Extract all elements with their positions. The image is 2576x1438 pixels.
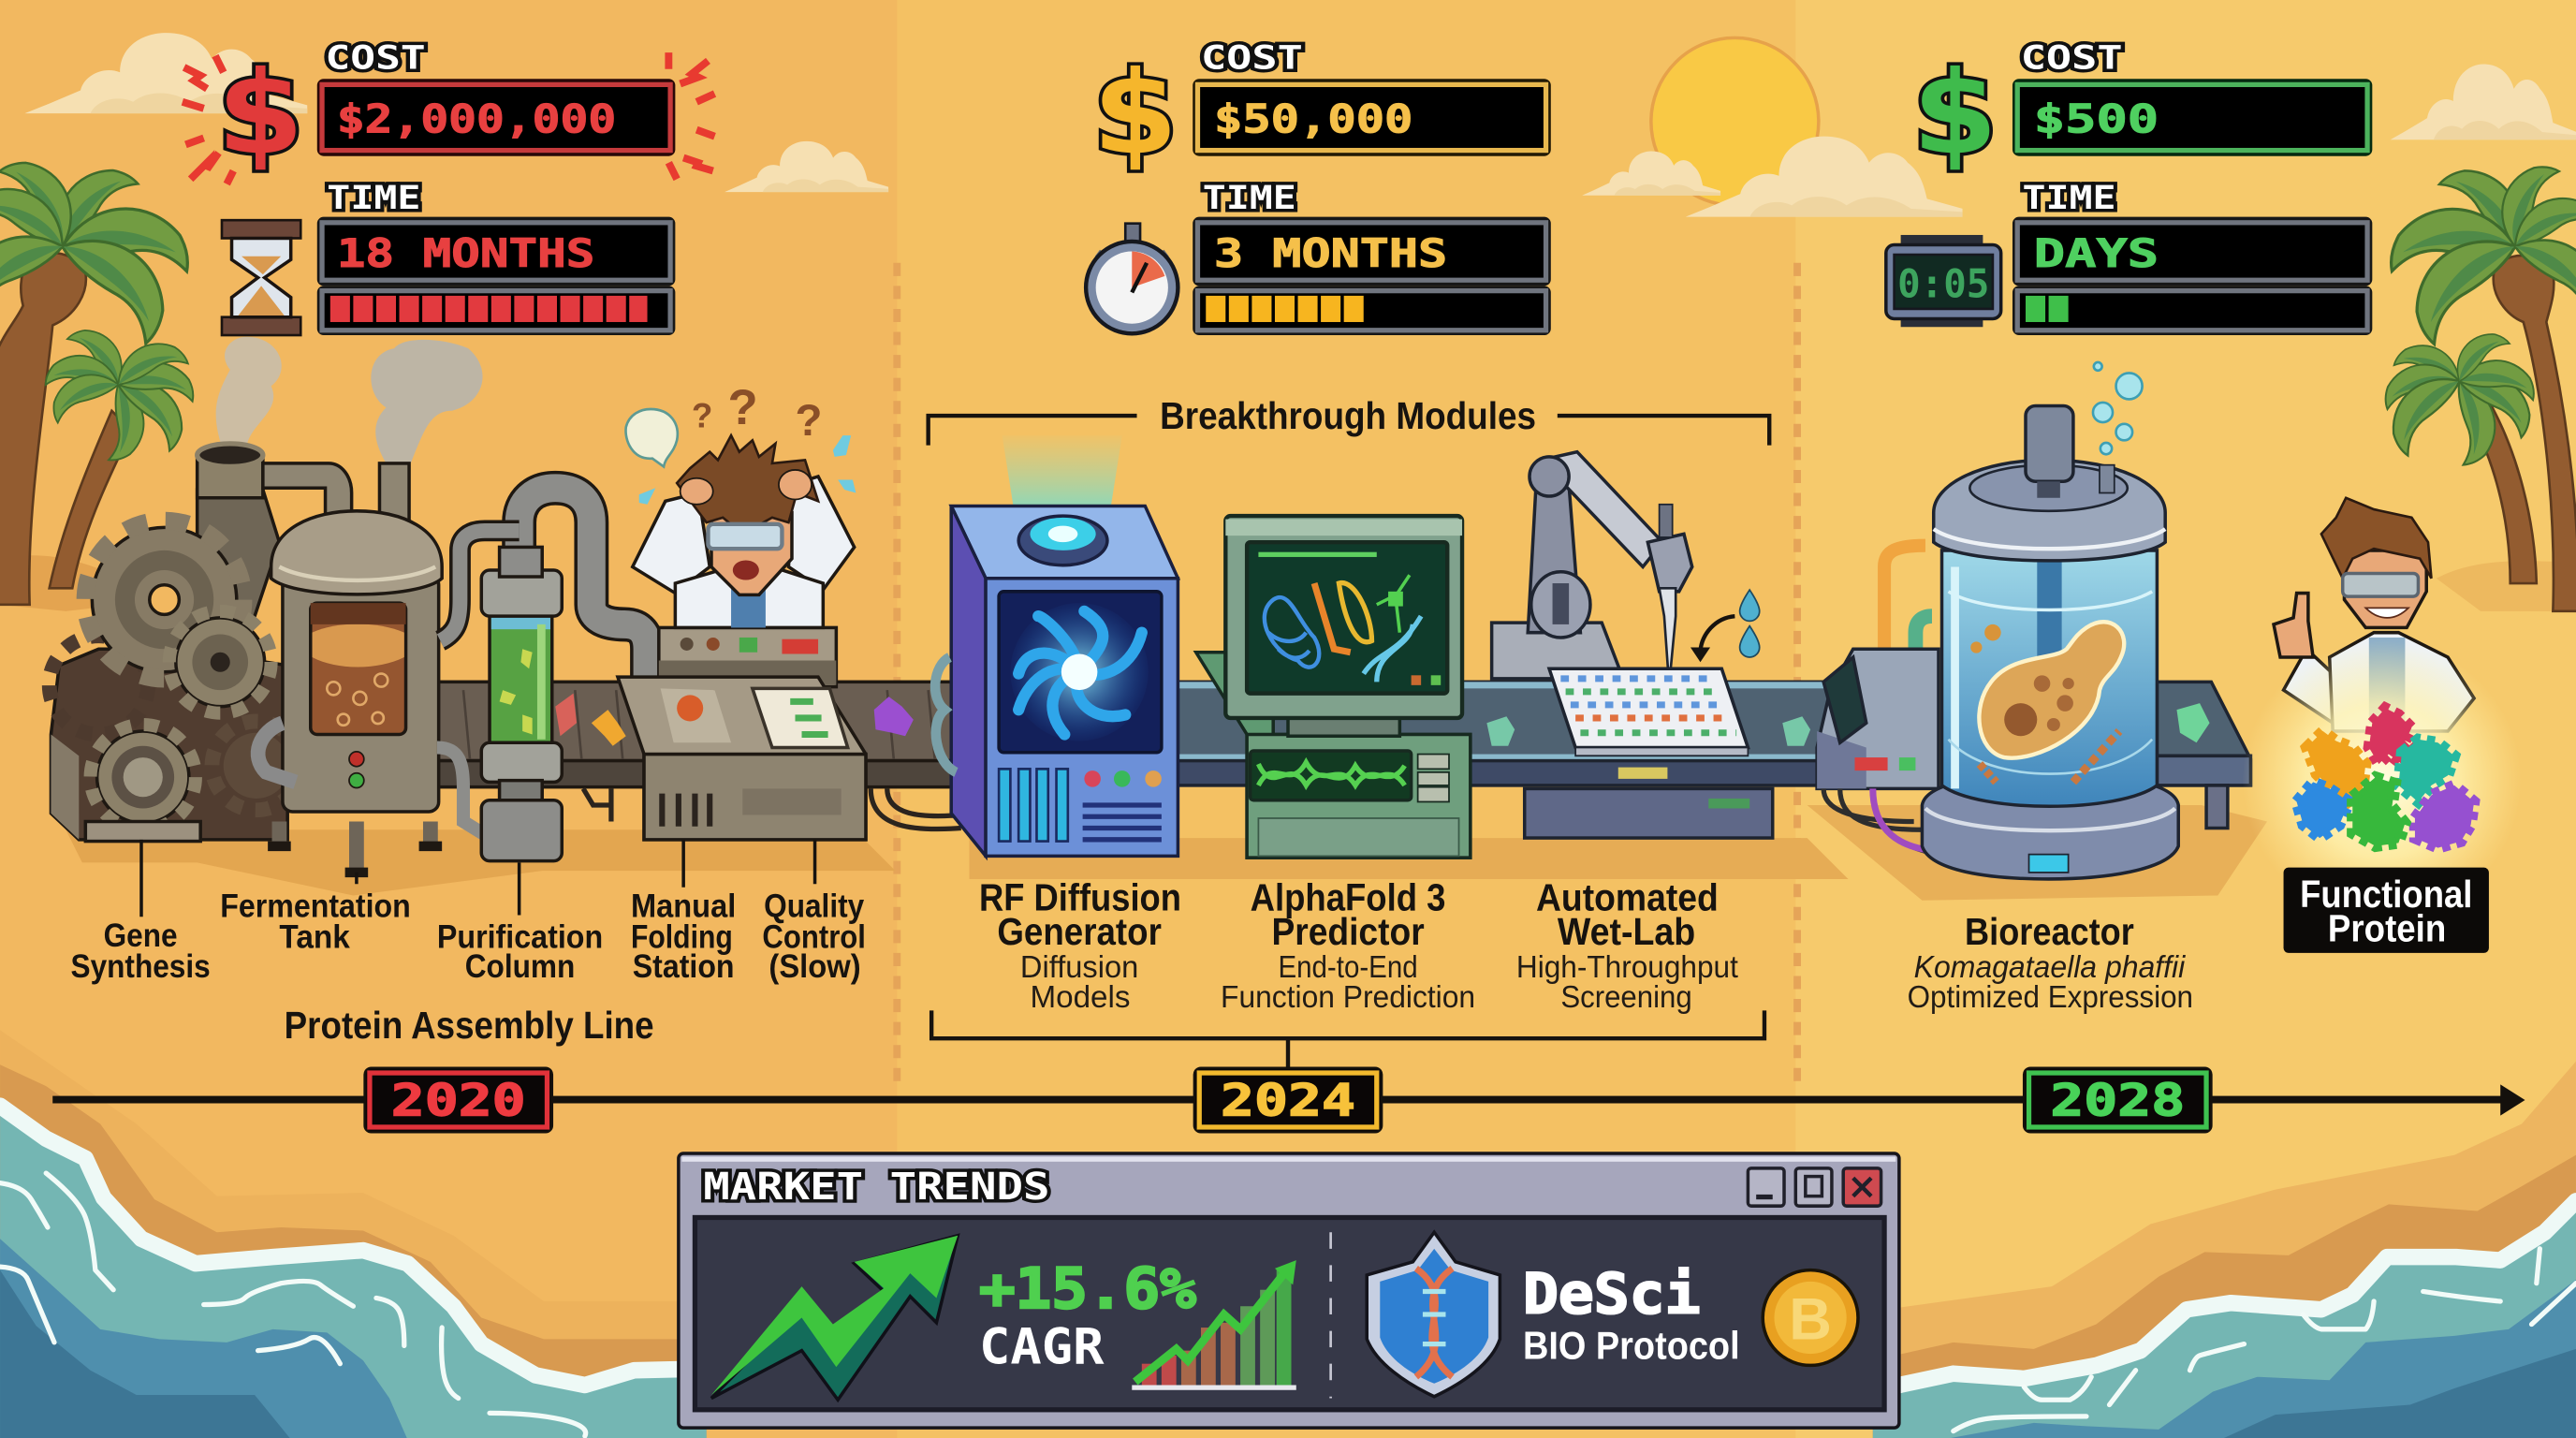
chimney [198,455,263,498]
icon: digital watch [1886,235,2001,327]
TIME label: TIME [1203,179,1296,217]
ground shadows [66,805,2267,901]
label: Quality Control (Slow) [762,888,866,985]
icon: red dollar with sparks [183,46,714,184]
icon: green dollar: $ [1912,46,1998,180]
lens [1018,516,1107,565]
palm trees left [0,147,198,605]
label: Gene Synthesis: Gene [104,917,178,954]
COST label: COST [1201,39,1303,78]
progress bar: 7 segments [1194,287,1549,333]
panel: market trends window [679,1153,1899,1428]
icon: yellow dollar: $ [1092,46,1178,180]
conveyor: breakthrough line [1178,682,1835,838]
ocean right [1873,1062,2576,1438]
label: Automated Wet-Lab: Wet-Lab [1558,910,1695,953]
icon: bitcoin coin: B [1789,1286,1832,1352]
confusion marks and sweat [626,380,856,505]
TIME label: TIME [2022,179,2116,217]
mini growth chart [1132,1260,1296,1390]
COST label: COST [326,39,426,78]
label: RF Diffusion Generator: Models [1030,980,1131,1015]
label: Bioreactor: Optimized Expression [1908,980,2193,1015]
ocean left [0,1030,707,1438]
icon: bitcoin coin [1763,1270,1858,1365]
clouds [24,33,2576,217]
label: Purification Column: Purification [437,919,603,956]
badge: functional protein [2284,868,2489,953]
bracket: modules to 2024 [931,1010,1764,1068]
era dividers [897,263,1797,1088]
swirl screen [999,592,1162,753]
label: AlphaFold 3 Predictor: Predictor [1271,910,1425,953]
badge: functional protein: Protein [2328,907,2446,950]
time readout: DAYS [2034,230,2159,276]
label: Fermentation Tank: Tank [279,919,350,956]
timeline badge: 2020 [365,1068,552,1132]
cost readout: $2,000,000 [337,95,616,141]
machine: bioreactor [1922,362,2178,879]
label: Manual Folding Station [631,888,736,985]
confusion marks and sweat: ? [795,396,822,446]
timeline badge: 2024: 2024 [1221,1076,1355,1127]
panel: 2028 stats [1886,39,2371,333]
stat: CAGR: +15.6% [979,1257,1196,1322]
labels: protein assembly line [71,888,866,1047]
stat: CAGR [979,1257,1196,1376]
machine: purification column [437,488,648,861]
time readout [319,218,674,285]
machine: RF diffusion generator [935,435,1178,856]
time readout [1194,218,1549,285]
label: Bioreactor: Komagataella phaffii [1914,950,2187,985]
label: Purification Column: Column [465,948,575,985]
protein cluster with glow [2243,640,2522,920]
timeline badge: 2024 [1194,1068,1382,1132]
cost readout [2014,81,2371,154]
confusion marks and sweat: ? [728,380,758,435]
icon: large green arrow [711,1236,958,1400]
label: AlphaFold 3 Predictor: End-to-End [1278,950,1418,985]
label: Gene Synthesis [71,917,211,985]
label: Automated Wet-Lab: Screening [1560,980,1692,1015]
palm trees right [2377,154,2576,611]
label: Fermentation Tank [220,888,411,956]
progress bar: 14 segments [319,287,674,333]
COST label: COST [2021,39,2123,78]
heading: breakthrough modules: Breakthrough Modules [1160,394,1536,437]
title: market trends: MARKET TRENDS [703,1165,1050,1209]
label: AlphaFold 3 Predictor: AlphaFold 3 [1251,875,1445,918]
heading: breakthrough modules [929,394,1769,446]
machine: gene synthesis gears [50,444,300,842]
beam [1003,435,1122,529]
label: RF Diffusion Generator: Generator [997,910,1162,953]
label: Bioreactor [1908,910,2193,1015]
brand: DeSci BIO Protocol: DeSci [1523,1262,1701,1327]
label: Manual Folding Station: Station [633,948,735,985]
timeline badge: 2028 [2024,1068,2211,1132]
label: Quality Control (Slow): Control [762,919,866,956]
time readout: 3 MONTHS [1214,230,1447,276]
label: RF Diffusion Generator: RF Diffusion [979,875,1181,918]
icon: stopwatch [1086,224,1178,333]
timeline badge: 2020: 2020 [391,1076,526,1127]
TIME label: TIME [327,179,420,217]
labels: breakthrough modules [979,875,1739,1015]
label: Protein Assembly Line: Protein Assembly Line [285,1004,654,1047]
machine: automated wet-lab [1492,452,1760,756]
brand: DeSci BIO Protocol [1523,1262,1740,1367]
window buttons [1748,1168,1881,1206]
label: Gene Synthesis: Synthesis [71,948,211,985]
items on conveyor [555,694,914,746]
time readout: 18 MONTHS [337,230,594,276]
scientist: happy [2274,498,2474,731]
icon: digital watch: 0:05 [1897,261,1989,307]
label: Purification Column [437,919,603,985]
well plate [1549,668,1748,756]
progress bar: 2 segments [2014,287,2371,333]
big gear [85,521,243,679]
label: AlphaFold 3 Predictor: Function Prediction [1221,980,1475,1015]
panel: 2020 stats [183,39,714,335]
badge: functional protein: Functional [2300,873,2472,916]
machine: AlphaFold 3 predictor [1196,516,1471,858]
leader lines: protein assembly line [141,840,815,917]
confusion marks and sweat: ? [692,396,712,434]
yeast cell [1970,622,2124,782]
label: RF Diffusion Generator [979,875,1181,1015]
medium gear [169,611,271,713]
label: Automated Wet-Lab: High-Throughput [1516,950,1739,985]
label: Automated Wet-Lab [1516,875,1739,1015]
icon: DNA shield [1367,1232,1500,1397]
label: Automated Wet-Lab: Automated [1536,875,1719,918]
label: Bioreactor: Bioreactor [1965,910,2134,953]
conveyor: output [2157,682,2250,829]
stat: CAGR: CAGR [979,1319,1105,1376]
conveyor: manual line [431,682,989,829]
label: Manual Folding Station: Manual [631,888,736,924]
label: Quality Control (Slow): Quality [764,888,865,924]
bioreactor pre-console [1817,546,1939,855]
scientist: stressed [633,435,855,627]
machine: fermentation tank [258,463,442,873]
icon: red dollar with sparks: $ [217,46,304,180]
icon: hourglass [222,220,300,335]
time readout [2014,218,2371,285]
cost readout: $50,000 [1214,95,1412,141]
bubbles [2093,362,2143,454]
timeline arrow [52,1084,2525,1116]
smoke [216,337,483,463]
label: Quality Control (Slow): (Slow) [768,948,861,985]
machine: manual folding station [618,627,866,840]
timeline badge: 2028: 2028 [2050,1076,2185,1127]
label: Fermentation Tank: Fermentation [220,888,411,924]
panel: 2024 stats [1086,39,1549,333]
lower gear [91,725,196,829]
label: Manual Folding Station: Folding [631,919,733,956]
label: AlphaFold 3 Predictor [1221,875,1475,1015]
divider [1330,1232,1332,1399]
cost readout [1194,81,1549,154]
label: RF Diffusion Generator: Diffusion [1020,950,1138,985]
cost readout: $500 [2034,95,2159,141]
brand: DeSci BIO Protocol: BIO Protocol [1523,1323,1740,1367]
cost readout [319,81,674,154]
sun [1651,37,1819,205]
